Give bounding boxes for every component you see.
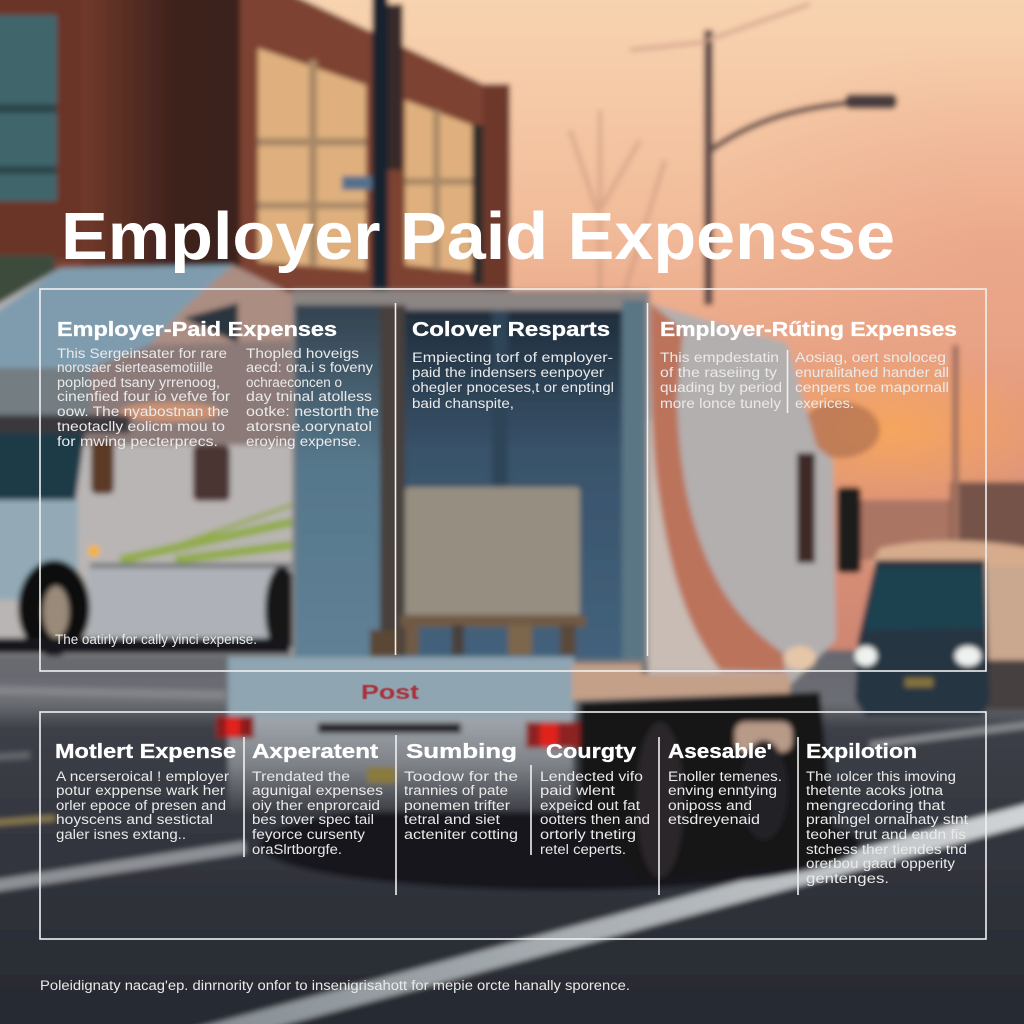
text block: third column left: of the raseiing ty [660,365,777,380]
road markings [0,690,1024,1024]
bare tree [570,110,665,290]
red truck logo: Post [361,682,419,704]
column: Expilotion: mengrecdoring that [806,798,945,813]
column: Expilotion: Expilotion [806,740,917,763]
column: Asesable: Asesable' [668,740,772,763]
dark van [855,541,1024,716]
column: Sumbing: Toodow for the [404,769,518,784]
column: Courgty: expeicd out fat [540,798,640,813]
footer note: Poleidignaty nacag'ep. dinrnority onfor to insenigrisahott for mepie orcte hanally sporence. [40,978,630,993]
column: Motlert Expense [55,740,236,842]
text block: first column left: This Sergeinsater for rare [57,346,227,361]
column: Axperatent: agunigal expenses [252,783,383,798]
column: Axperatent: Trendated the [252,769,350,784]
text block: third column right: cenpers toe mapornall [795,380,949,395]
sun glow [720,350,1024,510]
sunset sky [0,0,1024,730]
column: Sumbing: ponemen trifter [404,798,511,813]
column: Axperatent [252,740,383,857]
text block: first column left: cinenfied four io vefve for [57,389,231,404]
column: Courgty: ootters then and [540,812,650,827]
column: Sumbing [404,740,518,842]
text block: first column right: day tninal atolless [246,389,372,404]
bottom panel border [40,712,986,939]
divider between second and third columns [646,303,648,656]
road [0,650,1024,1024]
column: Motlert Expense: Motlert Expense [55,740,236,763]
column: Asesable: oniposs and [668,798,752,813]
text block: second column: paid the indensers eenpoyer [412,365,605,380]
column: Expilotion: The ıolcer this imoving [806,769,956,784]
column: Sumbing: Sumbing [406,740,517,763]
text block: first column right: aecd: ora.i s foveny [246,360,373,375]
divider between first and second columns [394,303,396,655]
column: Courgty: Lendected vifo [540,769,643,784]
brick building [0,0,510,305]
title: Employer Paid Expensse [61,199,895,274]
divider inside third column [786,350,788,413]
column: Asesable: etsdreyenaid [668,812,760,827]
top panel border [40,289,986,671]
text block: third column right: exerices. [795,396,854,411]
heading: Employer-Ruting Expenses: Employer-Rűting Expenses [660,318,957,341]
column: Sumbing: acteniter cotting [404,827,518,842]
column dividers [244,735,798,895]
column: Motlert Expense: galer isnes extang.. [56,827,186,842]
pink haze [680,40,1024,460]
column: Axperatent: Axperatent [252,740,378,763]
column: Expilotion: gentenges. [806,871,889,886]
column: Axperatent: bes tover spec tail [252,812,374,827]
column: Expilotion: orerbou gaad opperity [806,856,955,871]
text block: third column left: more lonce tunely [660,396,781,411]
column: Asesable: enving enntying [668,783,777,798]
street lamp [630,4,897,305]
panel: top three-column frame [40,289,986,671]
column: Motlert Expense: A ncerseroical ! employer [56,769,230,784]
shadow beneath trucks [260,800,860,890]
box truck cargo interior [292,290,650,662]
text block: first column right: ootke: nestorth the [246,404,379,419]
text block: first column right: atorsne.oorynatol [246,419,372,434]
heading: Colover Resparts: Colover Resparts [412,318,610,341]
column: Courgty: ortorly tnetirg [540,827,636,842]
truck rear panel and lower body [216,657,581,812]
truck bed and wheels [572,664,836,880]
column: Axperatent: oiy ther enprorcaid [252,798,380,813]
column: Motlert Expense: orler epoce of presen and [56,798,226,813]
text block: second column: ohegler pnoceses,t or enptingl [412,380,614,395]
column: Asesable: Enoller temenes. [668,769,782,784]
column: Courgty: retel ceperts. [540,842,626,857]
column: Axperatent: feyorce cursenty [252,827,365,842]
text block: second column [412,350,614,411]
text block: first column left: norosaer sierteasemotiille [57,360,213,375]
text block: third column left [660,350,782,411]
utility pole [342,0,403,292]
heading: Employer-Paid Expenses: Employer-Paid Expenses [57,318,337,341]
column: Expilotion: thetente acoks jotna [806,783,944,798]
cargo crate on pallet [370,487,586,658]
column: Courgty: paid wlent [540,783,615,798]
text block: first column right: eroying expense. [246,434,361,449]
text block: second column: baid chanspite, [412,396,514,411]
text block: third column right [795,350,949,411]
distant buildings and poles [800,345,1024,562]
text block: first column left: tneotaclly eolicm mou to [57,419,225,434]
note at panel bottom: The oatirly for cally yinci expense. [55,632,257,647]
text block: first column left: for mwing pecterprecs. [57,434,218,449]
left white truck [0,265,300,656]
text block: second column: Empiecting torf of employer- [412,350,613,365]
text block: third column right: Aosiag, oert snoloceg [795,350,946,365]
text block: first column left [57,346,231,449]
text block: third column left: quading by period [660,380,782,395]
text block: third column right: enuralitahed hander all [795,365,949,380]
column: Sumbing: tetral and siet [404,812,500,827]
column: Expilotion [806,740,968,886]
column: Sumbing: trannies of pate [404,783,508,798]
column: Axperatent: oraSlrtborgfe. [252,842,342,857]
column: Expilotion: stchess ther tiendes tnd [806,842,967,857]
column: Motlert Expense: potur exppense wark her [56,783,226,798]
column: Motlert Expense: hoyscens and sestictal [56,812,213,827]
column: Courgty [540,740,650,857]
right truck body with orange swoosh [648,303,861,685]
column: Courgty: Courgty [546,740,637,763]
text block: third column left: This empdestatin [660,350,779,365]
text block: first column right: Thopled hoveigs [246,346,359,361]
column: Expilotion: teoher trut and endn fis [806,827,966,842]
column: Expilotion: pranlngel ornalhaty stnt [806,812,968,827]
panel: bottom six-column frame [40,712,986,939]
text block: first column right [246,346,379,449]
text block: first column left: poploped tsany yrrenoog, [57,375,220,390]
text block: first column right: ochraeconcen o [246,375,342,390]
text block: first column left: oow. The nyabostnan the [57,404,229,419]
column: Asesable [668,740,782,827]
